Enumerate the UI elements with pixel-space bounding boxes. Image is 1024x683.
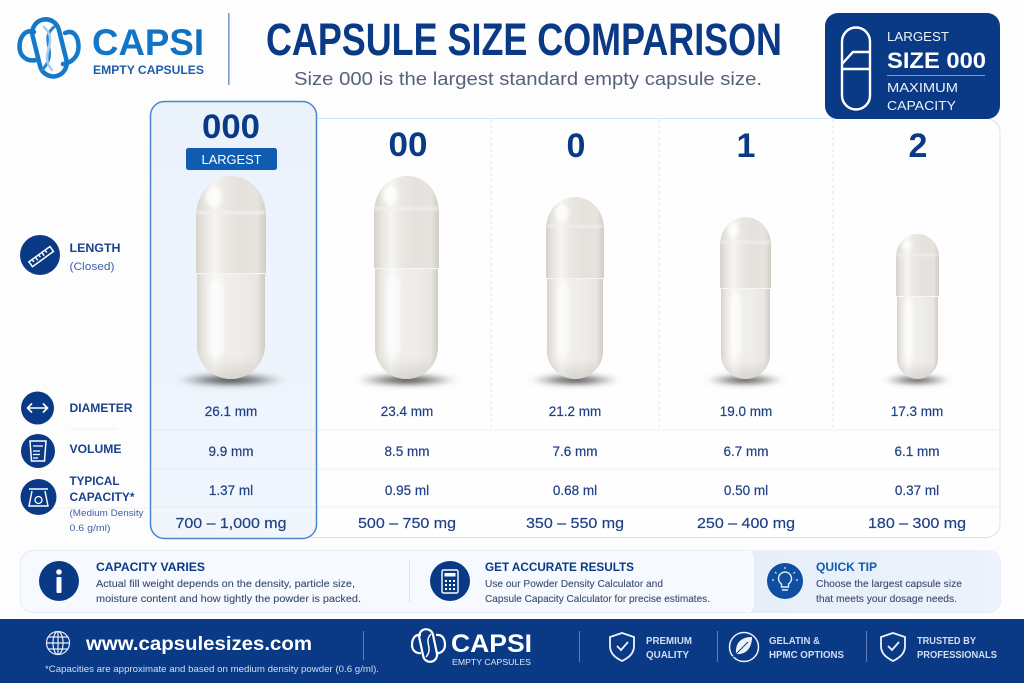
text: quick tip xyxy=(816,560,962,605)
row label: volume: VOLUME xyxy=(70,442,122,456)
icon: globe xyxy=(46,632,70,654)
row values: diameter: 21.2 mm xyxy=(549,404,601,419)
row values: diameter: 23.4 mm xyxy=(381,404,433,419)
size heading 1: 1 xyxy=(737,127,755,165)
row label: typical capacity: CAPACITY* xyxy=(70,490,135,504)
website: www.capsulesizes.com xyxy=(85,633,312,655)
badge text: SIZE 000 xyxy=(887,48,986,73)
badge text xyxy=(887,29,986,113)
row label: volume xyxy=(21,434,122,468)
logo wordmark: CAPSI xyxy=(92,22,204,63)
row values: diameter xyxy=(205,404,943,419)
icon: ruler xyxy=(20,235,60,275)
capsule 0 xyxy=(529,197,621,386)
capsule 000 xyxy=(175,176,287,387)
size heading 000: 000 xyxy=(202,108,260,146)
text: get accurate results: Capsule Capacity Calculator for precise estimates. xyxy=(485,593,710,605)
label text: LENGTH xyxy=(70,241,120,255)
row values: capacity mg: 500 – 750 mg xyxy=(358,515,456,532)
tag: largest: LARGEST xyxy=(202,152,262,167)
row values: diameter: 19.0 mm xyxy=(720,404,772,419)
row values: capacity mg: 700 – 1,000 mg xyxy=(176,515,286,532)
icon: scale xyxy=(20,479,56,515)
footer logo xyxy=(412,628,532,667)
text: get accurate results: Use our Powder Density Calculator and xyxy=(485,578,663,590)
badge: trusted by professionals xyxy=(881,633,997,661)
icon: capsule outline xyxy=(842,28,870,110)
row label: diameter: DIAMETER xyxy=(70,401,133,415)
logo tagline: EMPTY CAPSULES xyxy=(93,65,204,77)
row values: capacity mg: 250 – 400 mg xyxy=(697,515,795,532)
row values: capacity mg xyxy=(176,515,966,532)
badge: premium quality: PREMIUM xyxy=(646,635,692,647)
row values: volume: 9.9 mm xyxy=(208,444,254,459)
icon: calculator xyxy=(430,561,470,601)
capsule 00 xyxy=(355,176,459,386)
row values: capacity ml xyxy=(209,483,939,498)
title: CAPSULE SIZE COMPARISON xyxy=(266,14,782,65)
footer logo: EMPTY CAPSULES xyxy=(452,658,531,667)
footnote: *Capacities are approximate and based on medium density powder (0.6 g/ml). xyxy=(45,664,379,675)
badge: trusted by professionals: TRUSTED BY xyxy=(917,635,976,647)
row values: capacity ml: 0.68 ml xyxy=(553,483,597,498)
badge: premium quality xyxy=(610,633,692,661)
text: capacity varies: CAPACITY VARIES xyxy=(96,560,205,574)
text: quick tip: QUICK TIP xyxy=(816,560,877,574)
text: quick tip: that meets your dosage needs. xyxy=(816,593,957,605)
row values: capacity ml: 0.37 ml xyxy=(895,483,939,498)
row values: capacity ml: 0.50 ml xyxy=(724,483,768,498)
footer xyxy=(0,619,1024,683)
text: capacity varies xyxy=(96,560,361,605)
row label: typical capacity: (Medium Density xyxy=(70,508,144,518)
logo: CAPSI Empty Capsules xyxy=(20,16,204,79)
badge: premium quality: QUALITY xyxy=(646,649,689,661)
badge text: LARGEST xyxy=(887,29,949,44)
badge: largest size 000 xyxy=(825,13,1000,119)
icon: info xyxy=(39,561,79,601)
subtitle: Size 000 is the largest standard empty capsule size. xyxy=(294,68,762,89)
badge text: MAXIMUM xyxy=(887,80,958,95)
row label: length xyxy=(20,235,120,275)
row label: length: (Closed) xyxy=(70,261,114,273)
row label: diameter xyxy=(21,392,133,424)
row label: typical capacity: 0.6 g/ml) xyxy=(70,523,110,533)
size heading 0: 0 xyxy=(567,127,585,165)
capsule 2 xyxy=(882,234,952,385)
badge: gelatin and HPMC options: GELATIN & xyxy=(769,635,820,647)
panel: comparison table xyxy=(22,118,1000,538)
row values: capacity mg: 350 – 550 mg xyxy=(526,515,624,532)
text: quick tip: Choose the largest capsule size xyxy=(816,578,962,590)
badge text: CAPACITY xyxy=(887,98,956,113)
size heading 00: 00 xyxy=(388,126,428,164)
row values: volume: 6.7 mm xyxy=(723,444,769,459)
badge: gelatin and HPMC options: HPMC OPTIONS xyxy=(769,649,844,661)
icon: beaker xyxy=(21,434,55,468)
badge: trusted by professionals: PROFESSIONALS xyxy=(917,649,997,661)
row values: volume xyxy=(208,444,940,459)
size heading 2: 2 xyxy=(909,127,927,165)
row values: diameter: 17.3 mm xyxy=(891,404,943,419)
panel: quick tip background xyxy=(752,550,1000,612)
text: get accurate results: GET ACCURATE RESULTS xyxy=(485,560,634,574)
icon: double arrow xyxy=(21,392,54,424)
panel: info strip xyxy=(20,550,1000,612)
text: get accurate results xyxy=(485,560,710,605)
badge: gelatin and HPMC options xyxy=(730,632,844,662)
icon: light bulb xyxy=(767,563,803,599)
footer logo: CAPSI xyxy=(451,630,532,658)
row label: typical capacity: TYPICAL xyxy=(70,474,120,488)
capsule 1 xyxy=(705,217,785,386)
row label: typical capacity xyxy=(20,474,144,533)
row values: capacity ml: 0.95 ml xyxy=(385,483,429,498)
text: capacity varies: Actual fill weight depends on the density, particle size, xyxy=(96,578,355,590)
row values: capacity mg: 180 – 300 mg xyxy=(868,515,966,532)
row values: volume: 8.5 mm xyxy=(384,444,430,459)
text: capacity varies: moisture content and how tightly the powder is packed. xyxy=(96,593,361,605)
row values: capacity ml: 1.37 ml xyxy=(209,483,253,498)
row values: diameter: 26.1 mm xyxy=(205,404,257,419)
highlighted column: size 000 xyxy=(150,102,316,538)
icon: capsule and DNA logo mark xyxy=(20,16,78,79)
tag: largest xyxy=(186,148,277,170)
row values: volume: 7.6 mm xyxy=(552,444,598,459)
row values: volume: 6.1 mm xyxy=(894,444,940,459)
